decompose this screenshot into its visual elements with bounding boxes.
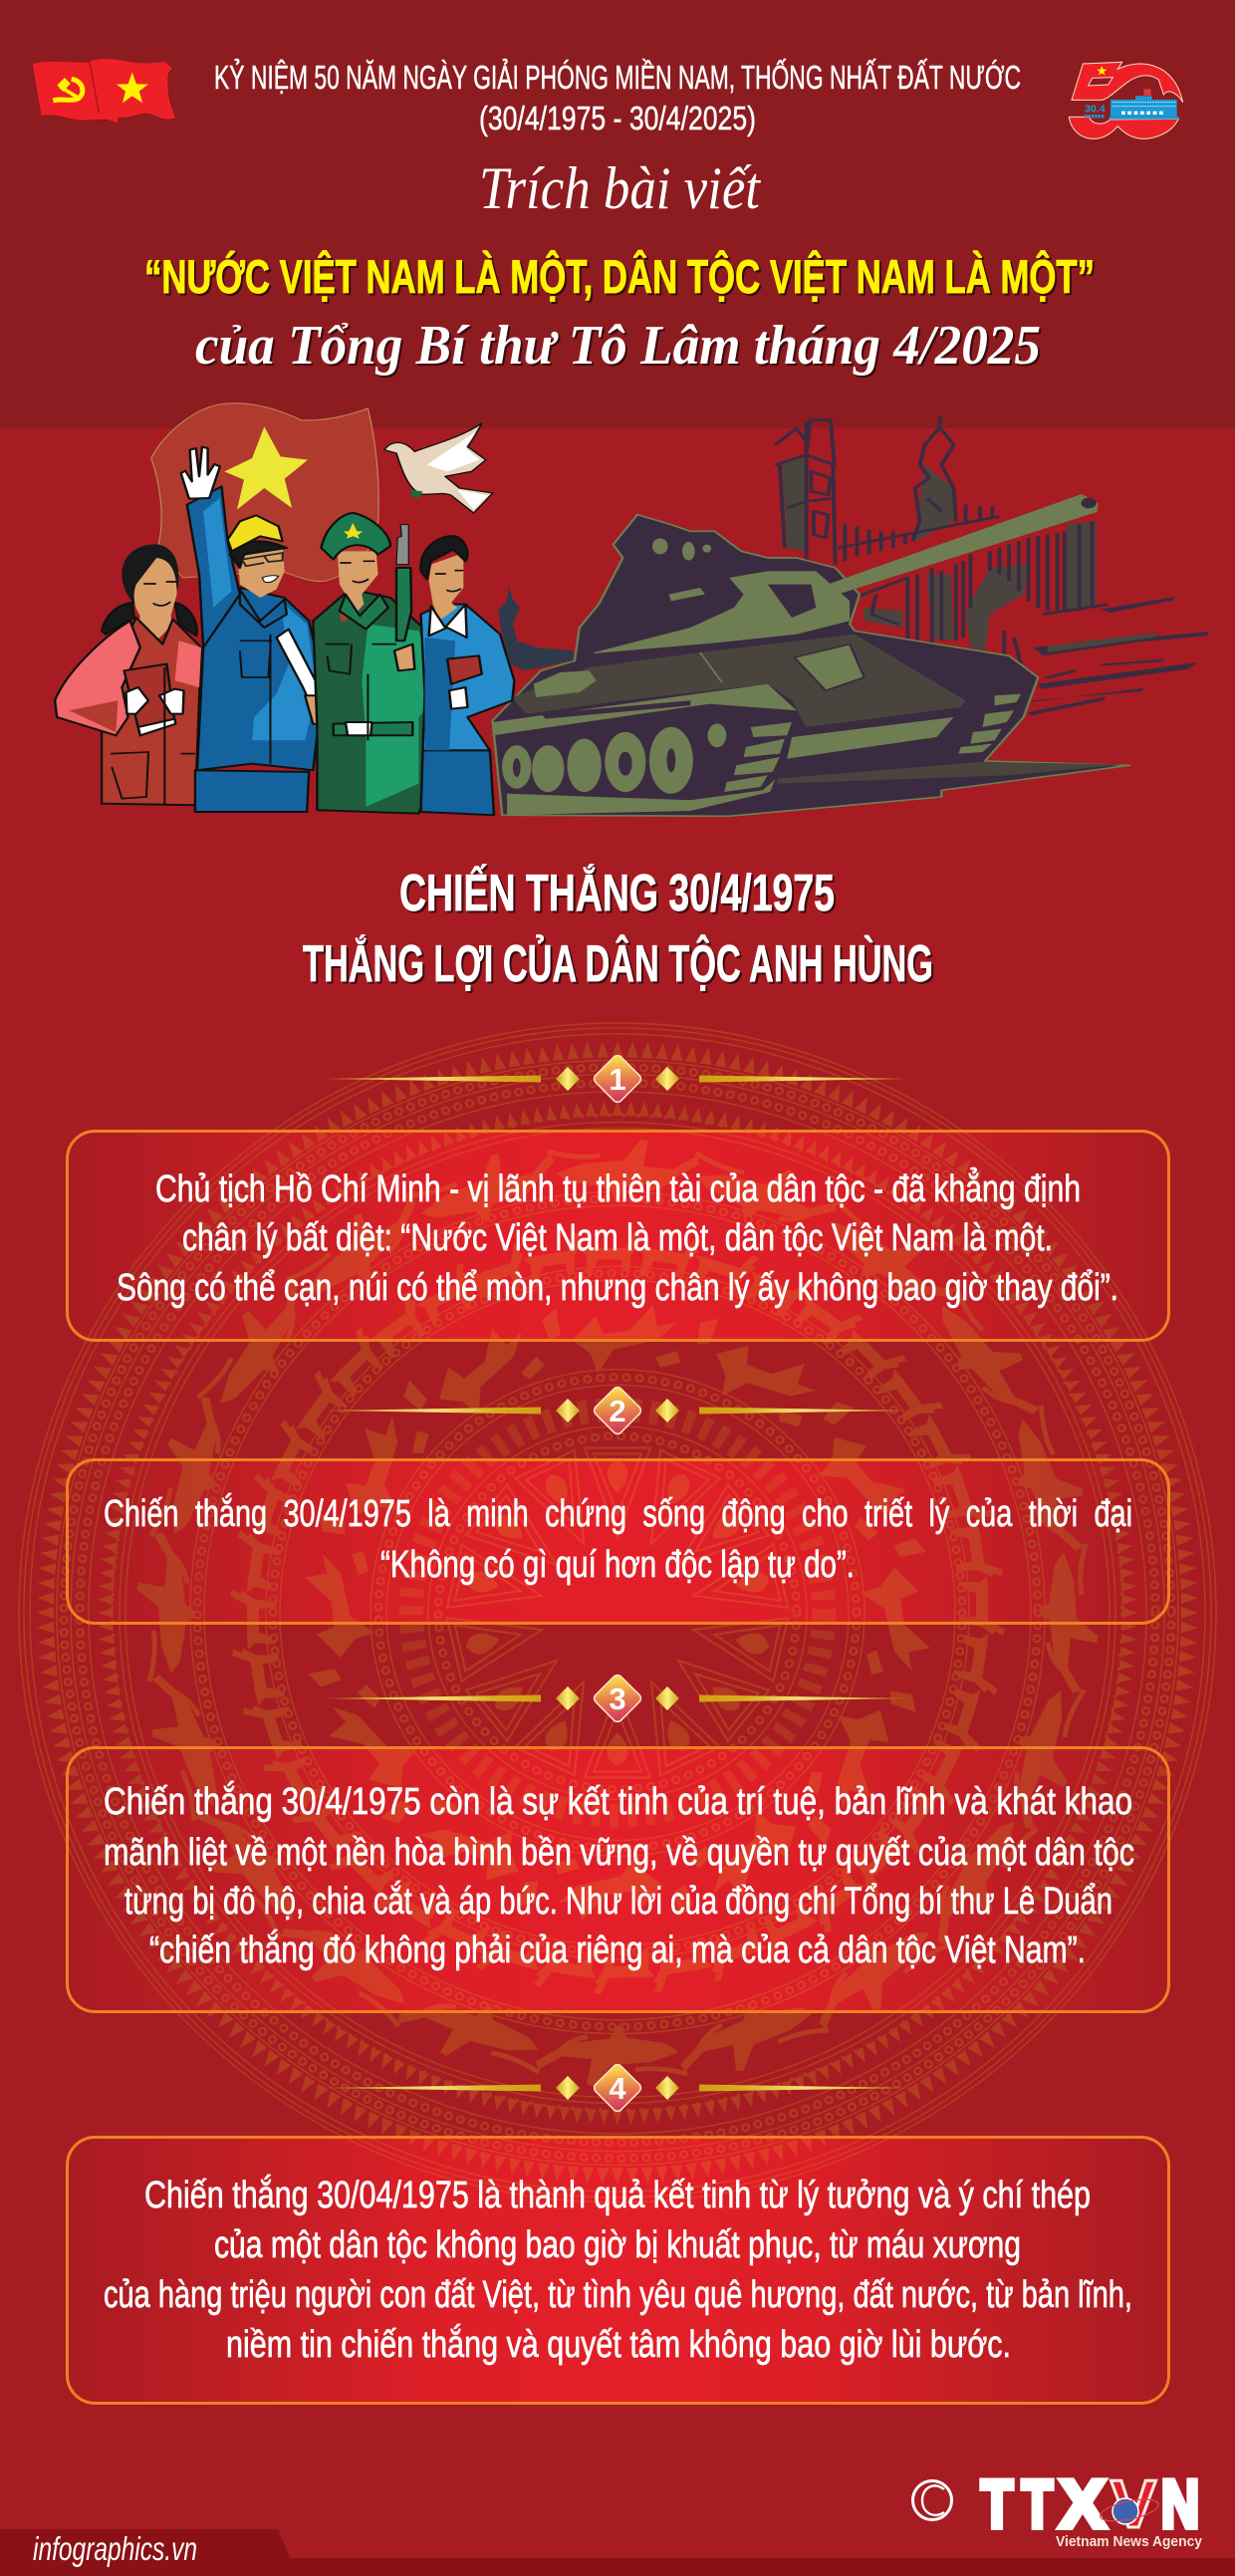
illustration: tank and palace xyxy=(493,416,1209,816)
divider 2 xyxy=(326,1386,909,1435)
header band xyxy=(0,0,1235,428)
bronze drum background pattern xyxy=(0,978,1235,2247)
soldier details xyxy=(652,538,711,601)
divider 4: 4 xyxy=(609,2071,626,2106)
icon: copyright mark xyxy=(912,2480,952,2520)
motion streaks xyxy=(1029,597,1209,715)
palace behind tank xyxy=(775,416,1109,665)
icon: 50 years logo: 30.4 xyxy=(1085,105,1106,116)
divider 3: 3 xyxy=(609,1681,626,1716)
logo: TTXVN: T xyxy=(1022,2466,1053,2542)
logo: TTXVN: X xyxy=(1060,2466,1106,2542)
panel: point 1 xyxy=(68,1132,1169,1341)
panel: point 4 xyxy=(68,2138,1169,2403)
heading: anniversary lines: (30/4/1975 - 30/4/2025) xyxy=(479,100,756,136)
icon: party and national flags xyxy=(33,59,175,124)
divider 1 xyxy=(326,1054,909,1104)
logo: TTXVN: Vietnam News Agency xyxy=(1056,2533,1203,2550)
section heading: THẮNG LỢI CỦA DÂN TỘC ANH HÙNG xyxy=(303,934,933,993)
woman in red jacket xyxy=(55,544,201,805)
section heading: CHIẾN THẮNG 30/4/1975 xyxy=(399,864,835,922)
panel: point 2 xyxy=(68,1460,1169,1624)
student in blue xyxy=(420,536,514,815)
small tree beside tank xyxy=(498,588,574,670)
hull xyxy=(512,635,966,727)
title intro: Trích bài viết xyxy=(479,155,761,221)
panel: point 4: niềm tin chiến thắng và quyết tâm không bao giờ lùi bước. xyxy=(226,2323,1011,2366)
logo: TTXVN: T xyxy=(981,2466,1013,2542)
footer strip xyxy=(0,2558,1235,2576)
background flag xyxy=(151,403,378,582)
dove xyxy=(384,423,493,513)
divider 2: 2 xyxy=(609,1394,626,1428)
logo: TTXVN: V xyxy=(1111,2466,1156,2542)
logo: TTXVN xyxy=(981,2466,1203,2550)
panel: point 4: của một dân tộc không bao giờ bị khuất phục, từ máu xương xyxy=(214,2224,1021,2266)
title author: của Tổng Bí thư Tô Lâm tháng 4/2025 xyxy=(195,315,1041,377)
icon: 50 years logo xyxy=(1069,62,1183,138)
divider 4 xyxy=(326,2063,909,2113)
divider 1: 1 xyxy=(609,1062,626,1097)
illustration: flag, dove and four people xyxy=(55,403,574,815)
section heading xyxy=(303,864,933,993)
footer tab with site name xyxy=(0,2529,298,2576)
soldier in green xyxy=(313,513,443,814)
wheels xyxy=(502,724,726,794)
divider 3 xyxy=(326,1674,909,1723)
panel: point 3 xyxy=(68,1747,1169,2012)
panel: point 2: “Không có gì quí hơn độc lập tự do”. xyxy=(380,1544,855,1586)
tank body xyxy=(493,515,1129,816)
logo: TTXVN: N xyxy=(1161,2466,1199,2542)
worker in blue with helmet xyxy=(181,447,348,812)
track plates xyxy=(724,694,1021,792)
heading: anniversary lines xyxy=(214,58,1021,136)
footer tab with site name: infographics.vn xyxy=(33,2530,197,2567)
